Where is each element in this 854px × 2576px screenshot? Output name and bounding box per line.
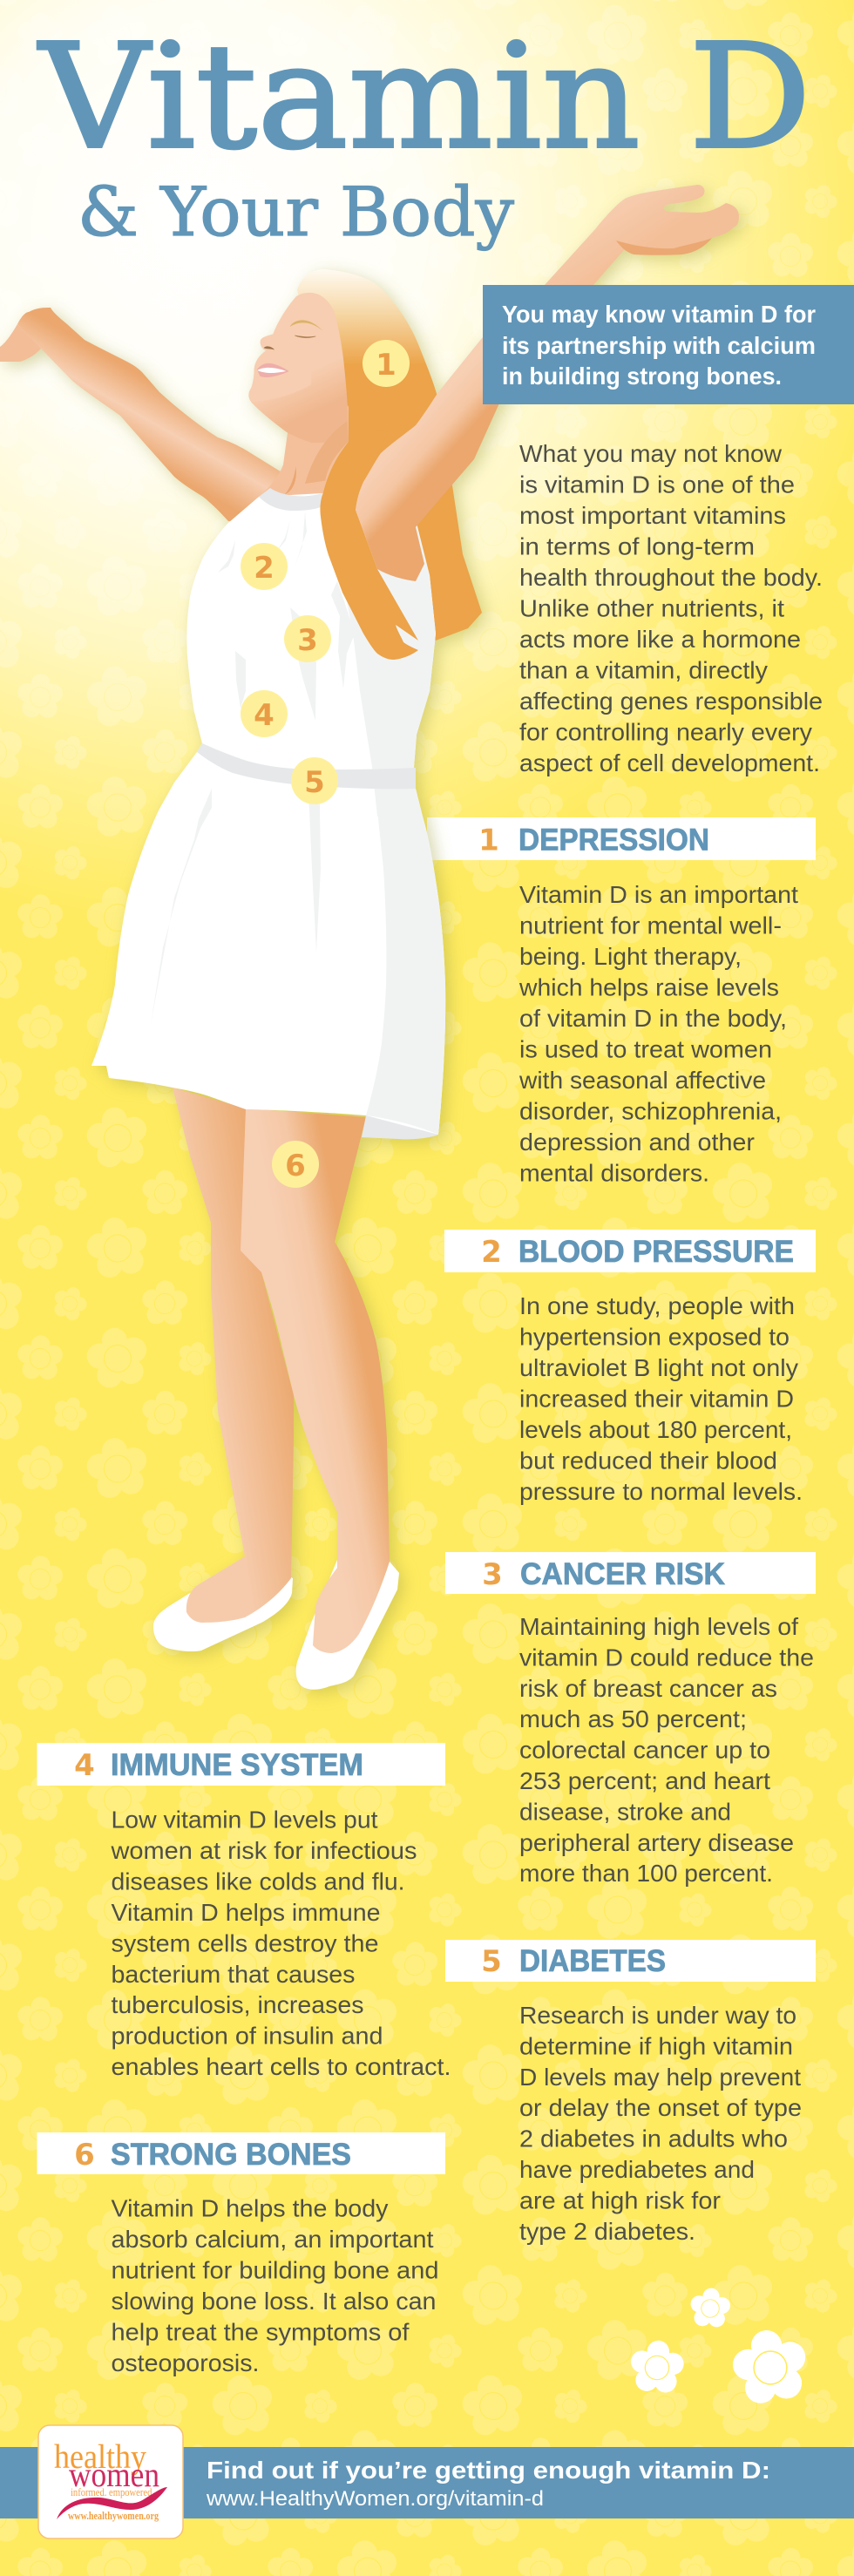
numbered marker 6 — [272, 1141, 319, 1188]
text: diabetes: Research is under way to — [519, 2002, 796, 2029]
numbered marker 5: 5 — [304, 765, 325, 800]
title: Vitamin D — [37, 14, 811, 181]
underskirt — [362, 1115, 438, 1139]
text: cancer risk: peripheral artery disease — [519, 1829, 794, 1856]
heading: depression: DEPRESSION — [518, 823, 709, 858]
text: depression: is used to treat women — [519, 1035, 772, 1063]
logo: healthy women — [38, 2425, 183, 2539]
numbered marker 1: 1 — [376, 348, 396, 383]
heading: cancer risk: 3 — [482, 1557, 503, 1592]
text: cancer risk — [519, 1613, 814, 1887]
left hand — [0, 324, 41, 362]
numbered marker 4: 4 — [254, 698, 274, 733]
text: diabetes: have prediabetes and — [519, 2156, 755, 2183]
text: immune system: women at risk for infectious — [110, 1837, 417, 1864]
white flowers — [625, 2284, 805, 2403]
text: depression: mental disorders. — [519, 1159, 709, 1187]
text: strong bones: osteoporosis. — [112, 2349, 260, 2376]
text: depression — [518, 881, 798, 1187]
text: strong bones: slowing bone loss. It also can — [112, 2288, 436, 2315]
callout: calcium: in building strong bones. — [502, 363, 782, 390]
heading: cancer risk: CANCER RISK — [520, 1557, 725, 1591]
text: immune system: production of insulin and — [112, 2023, 383, 2050]
logo: healthy women: women — [69, 2455, 159, 2494]
intro text: health throughout the body. — [519, 564, 823, 591]
intro text: Unlike other nutrients, it — [519, 594, 784, 622]
text: immune system: system cells destroy the — [112, 1929, 378, 1956]
collar — [259, 488, 322, 511]
numbered marker 6: 6 — [285, 1149, 306, 1183]
text: strong bones: absorb calcium, an important — [112, 2226, 434, 2253]
text: immune system: enables heart cells to contract. — [112, 2053, 451, 2080]
heading: diabetes: 5 — [481, 1944, 502, 1979]
intro text: for controlling nearly every — [519, 718, 812, 746]
intro text: aspect of cell development. — [519, 749, 820, 776]
back leg — [173, 1088, 294, 1623]
text: blood pressure: increased their vitamin D — [519, 1386, 794, 1412]
intro text: most important vitamins — [519, 502, 786, 529]
text: depression: with seasonal affective — [518, 1067, 766, 1094]
text: depression: depression and other — [519, 1129, 755, 1156]
text: diabetes: are at high risk for — [519, 2186, 721, 2213]
heading: strong bones: STRONG BONES — [111, 2138, 351, 2172]
text: immune system: bacterium that causes — [112, 1961, 356, 1988]
heading: immune system — [37, 1743, 445, 1786]
heading: blood pressure — [444, 1230, 816, 1272]
footer call to action: www.HealthyWomen.org/vitamin-d — [206, 2487, 544, 2511]
text: cancer risk: colorectal cancer up to — [519, 1737, 770, 1764]
dress shading — [151, 512, 445, 1135]
intro text: affecting genes responsible — [519, 688, 823, 715]
text: immune system: diseases like colds and flu. — [112, 1868, 404, 1895]
hair back — [297, 269, 482, 641]
numbered marker 1 — [363, 340, 410, 387]
footer band — [0, 2447, 854, 2518]
callout: calcium — [483, 285, 854, 404]
text: immune system: Vitamin D helps immune — [112, 1899, 380, 1926]
palm edge — [616, 238, 712, 255]
text: diabetes: determine if high vitamin — [519, 2032, 793, 2059]
text: strong bones: nutrient for building bone and — [112, 2257, 439, 2283]
numbered marker 2: 2 — [254, 551, 274, 586]
intro text: is vitamin D is one of the — [519, 471, 795, 498]
text: cancer risk: much as 50 percent; — [519, 1705, 747, 1732]
heading: strong bones — [37, 2132, 445, 2174]
text: depression: which helps raise levels — [518, 974, 779, 1000]
hair lock — [320, 427, 418, 660]
heading: blood pressure: BLOOD PRESSURE — [518, 1235, 794, 1269]
text: cancer risk: more than 100 percent. — [519, 1860, 773, 1887]
intro text: than a vitamin, directly — [519, 657, 768, 683]
logo swoosh — [57, 2487, 167, 2519]
text: cancer risk: disease, stroke and — [519, 1798, 731, 1825]
text: cancer risk: 253 percent; and heart — [519, 1767, 770, 1794]
nostril — [264, 346, 274, 349]
belt — [197, 743, 416, 789]
text: blood pressure: hypertension exposed to — [519, 1323, 790, 1351]
neck shadow — [305, 421, 349, 484]
intro text — [519, 440, 823, 776]
text: strong bones — [112, 2194, 439, 2376]
text: depression: of vitamin D in the body, — [519, 1005, 787, 1032]
text: blood pressure: pressure to normal levels. — [519, 1478, 803, 1505]
text: depression: being. Light therapy, — [519, 943, 742, 970]
numbered marker 5 — [291, 757, 338, 804]
right arm — [356, 285, 593, 581]
intro text: in terms of long-term — [519, 533, 755, 559]
dress — [92, 493, 445, 1135]
text: depression: disorder, schizophrenia, — [519, 1098, 782, 1124]
numbered marker 3 — [284, 615, 331, 662]
text: strong bones: help treat the symptoms of — [112, 2318, 410, 2346]
heading: strong bones: 6 — [74, 2138, 95, 2173]
numbered marker 2 — [241, 543, 288, 590]
left arm — [17, 308, 283, 523]
neck and head — [248, 293, 349, 501]
heading: diabetes — [445, 1940, 816, 1982]
heading: immune system: 4 — [74, 1748, 95, 1783]
heading: depression: 1 — [478, 823, 499, 858]
text: cancer risk: Maintaining high levels of — [519, 1613, 798, 1640]
heading: immune system: IMMUNE SYSTEM — [111, 1748, 363, 1782]
logo: healthy women: www.healthywomen.org — [68, 2510, 159, 2522]
numbered marker 3: 3 — [297, 623, 318, 658]
heading: cancer risk — [445, 1552, 816, 1594]
text: depression: nutrient for mental well- — [519, 912, 782, 939]
intro text: acts more like a hormone — [519, 626, 801, 653]
logo: healthy women: informed. empowered. — [71, 2485, 154, 2498]
intro text: What you may not know — [519, 440, 782, 467]
right hand — [545, 185, 739, 285]
numbered marker 4 — [241, 690, 288, 737]
eyebrow — [290, 320, 322, 330]
text: diabetes: or delay the onset of type — [519, 2094, 802, 2121]
heading: depression — [427, 817, 816, 860]
logo: healthy women: healthy — [54, 2438, 146, 2476]
subtitle: & Your Body — [78, 173, 514, 252]
callout: calcium: its partnership with calcium — [502, 332, 816, 359]
footer call to action — [206, 2457, 770, 2511]
text: diabetes — [519, 2002, 802, 2245]
text: cancer risk: risk of breast cancer as — [519, 1675, 777, 1702]
text: immune system: Low vitamin D levels put — [112, 1806, 378, 1834]
text: immune system — [110, 1806, 451, 2080]
text: blood pressure: ultraviolet B light not only — [519, 1354, 798, 1381]
text: blood pressure: levels about 180 percent, — [519, 1416, 792, 1443]
text: blood pressure — [519, 1292, 803, 1505]
text: blood pressure: In one study, people with — [519, 1292, 795, 1319]
heading: diabetes: DIABETES — [519, 1944, 666, 1978]
text: blood pressure: but reduced their blood — [519, 1447, 777, 1474]
text: diabetes: type 2 diabetes. — [519, 2218, 695, 2245]
text: immune system: tuberculosis, increases — [112, 1991, 364, 2018]
heading: blood pressure: 2 — [481, 1235, 502, 1270]
callout: calcium: You may know vitamin D for — [502, 301, 816, 328]
text: cancer risk: vitamin D could reduce the — [519, 1644, 814, 1671]
text: strong bones: Vitamin D helps the body — [112, 2194, 389, 2222]
closed eye — [295, 336, 315, 338]
mouth — [257, 363, 289, 377]
front leg — [241, 1108, 390, 1653]
text: diabetes: 2 diabetes in adults who — [519, 2125, 788, 2152]
footer call to action: Find out if you’re getting enough vitamin D: — [207, 2457, 770, 2484]
shoes — [153, 1559, 399, 1690]
text: depression: Vitamin D is an important — [519, 881, 798, 908]
text: diabetes: D levels may help prevent — [519, 2064, 801, 2091]
figure: woman with raised arms — [0, 185, 739, 1690]
